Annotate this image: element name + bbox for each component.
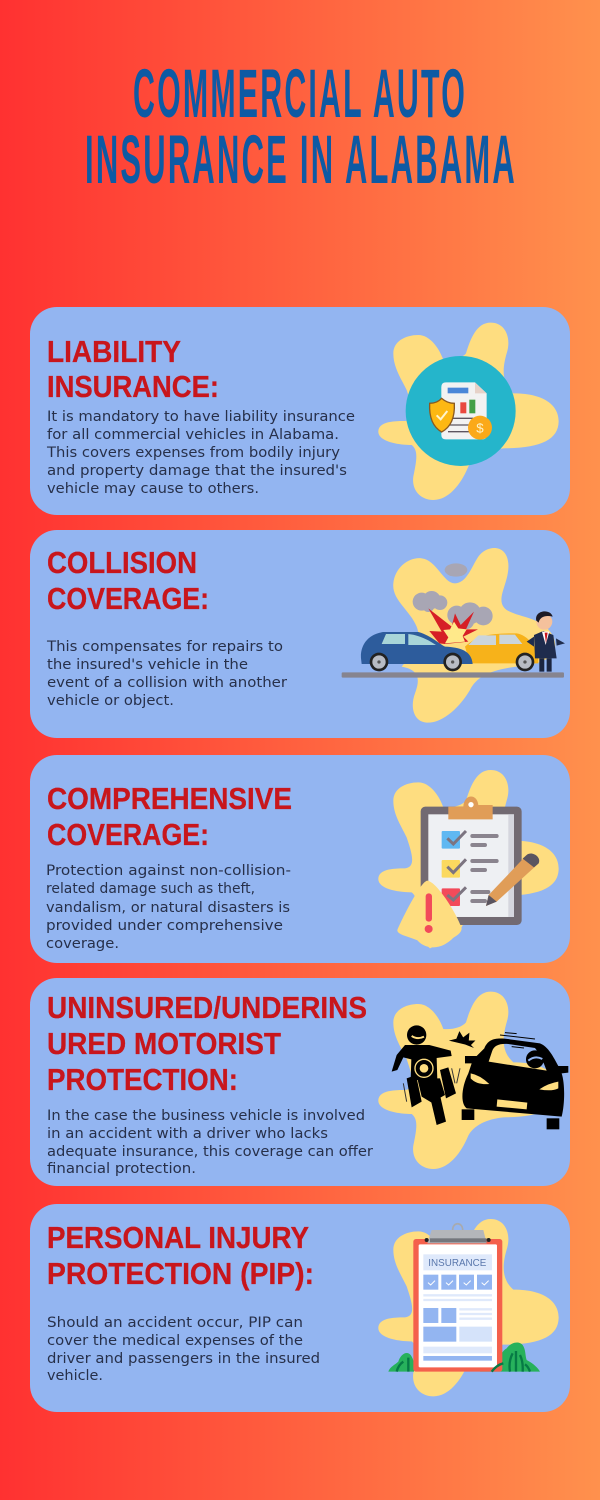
text: pip description: vehicle. (47, 1368, 103, 1384)
heading: liability insurance: INSURANCE: (47, 369, 219, 404)
smoke clouds (413, 563, 493, 629)
heading: uninsured motorist protection: UNINSURED/UNDERINS (47, 990, 367, 1025)
text: collision description: This compensates for repairs to (46, 639, 283, 655)
icon: policy document with shield and coin: $ (476, 420, 484, 435)
heading: comprehensive coverage: COVERAGE: (47, 817, 209, 852)
heading: collision coverage: COVERAGE: (47, 581, 209, 616)
text: comprehensive description: provided under comprehensive (46, 918, 283, 934)
panel: collision coverage (30, 530, 570, 738)
text: uninsured description: In the case the business vehicle is involved (47, 1108, 365, 1124)
heading: uninsured motorist protection: URED MOTORIST (47, 1026, 281, 1061)
icon: insurance clipboard with bushes: INSURANCE (428, 1258, 487, 1269)
panel: comprehensive coverage (30, 755, 570, 963)
heading: comprehensive coverage (47, 781, 292, 852)
text: uninsured description: adequate insurance, this coverage can offer (47, 1144, 373, 1160)
text: pip description: Should an accident occur, PIP can (47, 1315, 303, 1331)
panel: personal injury protection (30, 1204, 570, 1412)
icon: policy document with shield and coin (378, 323, 559, 500)
text: liability description: vehicle may cause to others. (47, 481, 259, 497)
text: comprehensive description: related damage such as theft, (46, 881, 255, 897)
heading: collision coverage: COLLISION (47, 545, 197, 580)
text: liability description (46, 409, 355, 497)
text: uninsured description: in an accident with a driver who lacks (47, 1126, 328, 1142)
heading: uninsured motorist protection: PROTECTION: (47, 1062, 238, 1097)
text: collision description (46, 639, 287, 709)
text: liability description: It is mandatory to have liability insurance (47, 409, 355, 425)
text: collision description: event of a collision with another (47, 675, 287, 691)
text: comprehensive description: Protection against non-collision- (46, 863, 291, 879)
heading: uninsured motorist protection (47, 990, 367, 1097)
heading: personal injury protection: PERSONAL INJURY (47, 1220, 309, 1255)
panel: liability insurance (30, 307, 570, 515)
text: liability description: for all commercial vehicles in Alabama. (47, 427, 339, 443)
text: comprehensive description: vandalism, or natural disasters is (46, 900, 290, 916)
heading: personal injury protection: PROTECTION (PIP): (47, 1256, 314, 1291)
text: uninsured description: financial protection. (47, 1161, 196, 1177)
bushes (388, 1343, 540, 1372)
text: liability description: and property damage that the insured's (47, 463, 347, 479)
text: comprehensive description (46, 863, 291, 952)
text: uninsured description (47, 1108, 373, 1177)
icon: motorcycle and car crash (378, 992, 568, 1169)
text: collision description: vehicle or object. (47, 693, 174, 709)
text: liability description: This covers expenses from bodily injury (46, 445, 340, 461)
text: comprehensive description: coverage. (46, 936, 119, 952)
heading: liability insurance: LIABILITY (47, 334, 181, 369)
icon: insurance clipboard with bushes (378, 1219, 559, 1396)
heading: liability insurance (47, 334, 219, 404)
icon: checklist clipboard with warning and pencil (378, 770, 559, 948)
title (85, 55, 517, 198)
heading: comprehensive coverage: COMPREHENSIVE (47, 781, 292, 816)
heading: personal injury protection (47, 1220, 314, 1291)
panel: uninsured/underinsured motorist protection (30, 978, 570, 1186)
text: pip description: cover the medical expenses of the (47, 1333, 303, 1349)
text: pip description: driver and passengers in the insured (47, 1351, 320, 1367)
heading: collision coverage (47, 545, 209, 616)
text: pip description (47, 1315, 320, 1384)
text: collision description: the insured's vehicle in the (47, 657, 248, 673)
icon: car collision with man (342, 548, 565, 723)
